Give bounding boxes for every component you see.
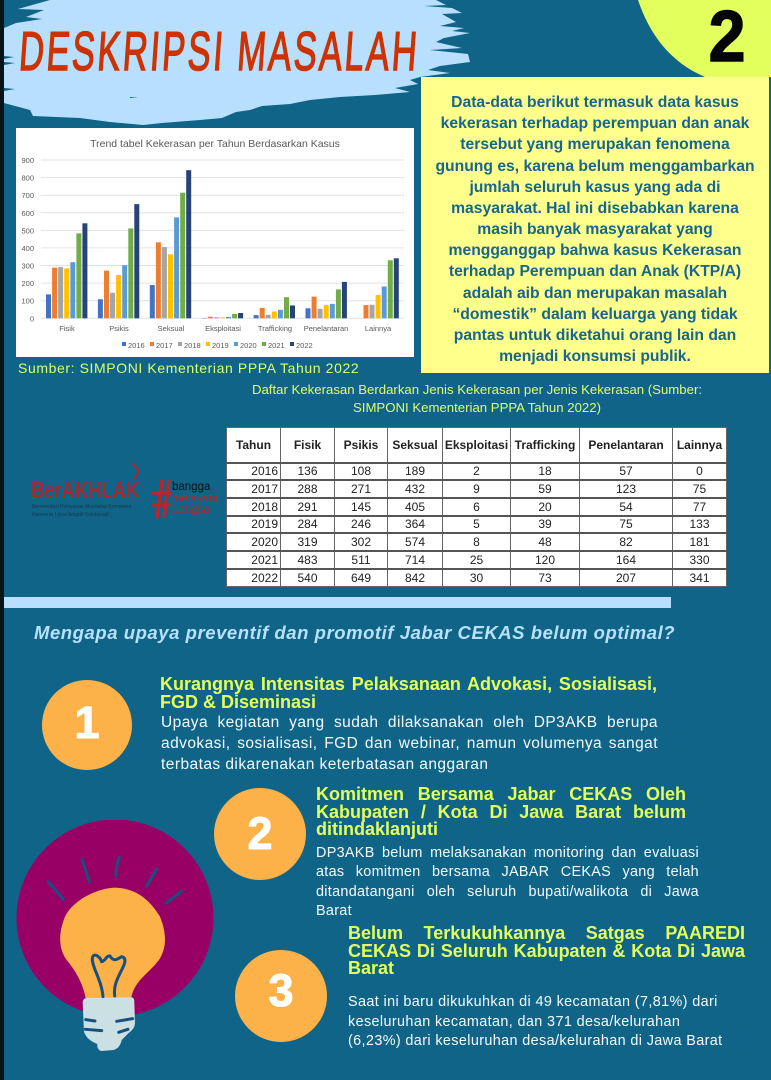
step 3 heading: Barat xyxy=(348,958,394,978)
icon: light bulb xyxy=(16,820,214,1051)
panel: description callout xyxy=(421,77,769,373)
data table: 25 xyxy=(470,553,483,567)
data table: 207 xyxy=(616,571,636,585)
data table xyxy=(226,427,727,587)
data table: 405 xyxy=(405,500,425,514)
y axis labels: 500 xyxy=(21,226,34,235)
section divider bar xyxy=(4,597,671,608)
data table: 30 xyxy=(470,571,483,585)
table caption: Daftar Kekerasan Berdarkan Jenis Kekerasan per Jenis Kekerasan (Sumber: xyxy=(252,382,702,397)
step 2 body: DP3AKB belum melaksanakan monitoring dan evaluasi xyxy=(316,845,699,861)
data table: 2019 xyxy=(251,517,278,531)
y axis labels: 300 xyxy=(21,262,34,270)
y axis labels: 400 xyxy=(21,244,34,253)
category labels: Lainnya xyxy=(365,324,392,333)
step 2 heading: Komitmen Bersama Jabar CEKAS Oleh xyxy=(316,784,686,804)
legend: 2020 xyxy=(240,341,257,350)
data table: 714 xyxy=(405,553,425,567)
bar chart: trend by case xyxy=(16,128,414,357)
data table: 5 xyxy=(473,517,480,531)
data table: 75 xyxy=(693,482,706,496)
step 1 heading xyxy=(160,674,657,712)
data table: 181 xyxy=(689,535,710,549)
step 3 body xyxy=(348,994,723,1049)
table caption: SIMPONI Kementerian PPPA Tahun 2022) xyxy=(353,400,601,415)
category labels: Eksploitasi xyxy=(205,324,241,333)
step 1 body: terbatas dikarenakan keterbatasan anggaran xyxy=(161,756,488,773)
data table: Seksual xyxy=(392,438,438,452)
panel: description callout: adalah aib dan merupakan masalah xyxy=(463,285,727,302)
data table: 20 xyxy=(538,500,552,514)
panel: description callout: jumlah seluruh kasus yang ada di xyxy=(469,179,721,196)
data table: 288 xyxy=(297,482,318,496)
data table: 284 xyxy=(297,517,318,531)
data table: 483 xyxy=(297,553,318,567)
table caption xyxy=(252,382,702,415)
step 2 heading: ditindaklanjuti xyxy=(316,819,438,839)
step 2 body: Barat xyxy=(316,903,352,919)
logo: BerAKHLAK: Harmonis Loyal Adaptif Kolaboratif xyxy=(32,512,109,518)
legend: 2022 xyxy=(296,341,313,350)
step 3 body: (6,23%) dari keseluruhan desa/kelurahan di Jawa Barat xyxy=(348,1033,723,1049)
data table: 330 xyxy=(689,553,710,567)
data table: 341 xyxy=(689,571,710,585)
data table: Fisik xyxy=(294,438,321,452)
step 1 body: advokasi, sosialisasi, FGD dan webinar, namun volumenya sangat xyxy=(161,735,658,752)
data table: 2020 xyxy=(251,535,278,549)
data table: 302 xyxy=(351,535,371,549)
panel: description callout: masyarakat. Hal ini disebabkan karena xyxy=(451,200,739,217)
data table: 73 xyxy=(538,571,552,585)
step 3 number badge xyxy=(235,950,327,1042)
data table: 246 xyxy=(351,517,371,531)
legend: 2017 xyxy=(156,341,173,350)
panel: description callout: mengganggap bahwa kasus Kekerasan xyxy=(449,242,741,259)
step 2 xyxy=(214,784,699,919)
background dark left edge xyxy=(0,0,4,1080)
data table: 511 xyxy=(351,553,371,567)
chart title: Trend tabel Kekerasan per Tahun Berdasarkan Kasus xyxy=(90,138,340,150)
data table: 48 xyxy=(538,535,552,549)
data table: Trafficking xyxy=(515,438,575,452)
data table: 82 xyxy=(619,535,633,549)
panel: description callout: gunung es, karena belum menggambarkan xyxy=(435,158,755,175)
step 3 heading xyxy=(348,923,746,978)
legend: 2016 xyxy=(128,341,145,350)
step 3 body: Saat ini baru dikukuhkan di 49 kecamatan (7,81%) dari xyxy=(348,994,718,1010)
step 1 body xyxy=(161,714,658,773)
data table: 120 xyxy=(535,553,555,567)
y axis labels xyxy=(21,156,34,323)
data table: 57 xyxy=(619,464,633,478)
step 1 body: Upaya kegiatan yang sudah dilaksanakan oleh DP3AKB berupa xyxy=(161,714,658,731)
logo: BerAKHLAK: BerAKHLAK xyxy=(31,477,139,503)
data table: 2022 xyxy=(251,571,278,585)
step 2 body: ditandatangani oleh seluruh bupati/walikota di Jawa xyxy=(316,884,699,900)
category labels: Fisik xyxy=(59,324,75,333)
data table: 39 xyxy=(538,517,552,531)
step 1 xyxy=(42,674,658,773)
data table: 164 xyxy=(616,553,636,567)
data table: 271 xyxy=(351,482,371,496)
step 3 heading: Belum Terkukuhkannya Satgas PAAREDI xyxy=(348,923,745,943)
data table: 18 xyxy=(538,464,552,478)
data table: Psikis xyxy=(344,438,378,452)
data table: 540 xyxy=(297,571,318,585)
data table: 364 xyxy=(405,517,425,531)
data table: Lainnya xyxy=(677,438,722,452)
step 1 heading: FGD & Diseminasi xyxy=(160,692,316,712)
data table: 432 xyxy=(405,482,425,496)
y axis labels: 800 xyxy=(21,174,34,183)
panel: description callout: terhadap Perempuan dan Anak (KTP/A) xyxy=(449,263,741,280)
category labels: Trafficking xyxy=(258,324,292,333)
step 2 heading xyxy=(316,784,686,839)
panel: description callout: Data-data berikut termasuk data kasus xyxy=(451,94,739,111)
legend: 2018 xyxy=(184,341,201,350)
panel: description callout: masih banyak masyarakat yang xyxy=(477,221,713,238)
data table: 108 xyxy=(351,464,371,478)
step 3 heading: CEKAS Di Seluruh Kabupaten & Kota Di Jawa xyxy=(348,940,745,960)
category labels: Penelantaran xyxy=(304,324,348,333)
data table: 0 xyxy=(696,464,703,478)
step 2 number badge xyxy=(214,788,306,880)
data table: Eksploitasi xyxy=(445,438,508,452)
panel: description callout: kekerasan terhadap perempuan dan anak xyxy=(441,115,749,132)
data table: 59 xyxy=(538,482,552,496)
panel: description callout: “domestik” dalam keluarga yang tidak xyxy=(452,306,738,323)
data table: 319 xyxy=(297,535,318,549)
category labels: Seksual xyxy=(158,324,185,333)
bars xyxy=(46,170,399,318)
step 1 number badge: 1 xyxy=(74,697,100,748)
step 1 number badge xyxy=(42,680,132,770)
data table: 2017 xyxy=(251,482,278,496)
data table: 133 xyxy=(689,517,710,531)
data table: 291 xyxy=(297,500,318,514)
legend: 2021 xyxy=(268,341,285,350)
step 2 body: atas komitmen bersama JABAR CEKAS yang telah xyxy=(316,864,699,880)
chart source: Sumber: SIMPONI Kementerian PPPA Tahun 2022 xyxy=(18,360,359,376)
section heading: Mengapa upaya preventif dan promotif Jabar CEKAS belum optimal? xyxy=(34,622,675,643)
data table: 2018 xyxy=(251,500,278,514)
corner decoration: lime shape xyxy=(638,0,771,77)
brush stroke title background xyxy=(4,0,470,125)
y axis labels: 900 xyxy=(21,156,34,165)
y axis labels: 700 xyxy=(21,191,34,200)
panel: description callout: tersebut yang merupakan fenomena xyxy=(460,136,730,153)
data table: 123 xyxy=(616,482,636,496)
category labels: Psikis xyxy=(109,324,129,333)
data table: 6 xyxy=(473,500,480,514)
step 2 number badge: 2 xyxy=(247,808,273,859)
y axis labels: 200 xyxy=(21,279,34,288)
data table: 2021 xyxy=(251,553,278,567)
panel: description callout: menjadi konsumsi publik. xyxy=(499,348,691,365)
data table: 2016 xyxy=(251,464,278,478)
logo: BerAKHLAK: Berorientasi Pelayanan Akuntabel Kompeten xyxy=(32,504,131,510)
step 2 body xyxy=(316,845,699,919)
logo: bangga melayani bangsa: melayani xyxy=(172,492,218,504)
data table: Tahun xyxy=(236,438,271,452)
logo: bangga melayani bangsa: bangsa xyxy=(172,504,210,516)
data table: 189 xyxy=(405,464,425,478)
logo: BerAKHLAK xyxy=(31,462,140,518)
data table: Penelantaran xyxy=(588,438,664,452)
y axis labels: 0 xyxy=(30,314,34,323)
step 1 heading: Kurangnya Intensitas Pelaksanaan Advokasi, Sosialisasi, xyxy=(160,674,657,694)
data table: 9 xyxy=(473,482,480,496)
step 2 heading: Kabupaten / Kota Di Jawa Barat belum xyxy=(316,802,686,822)
data table: 2 xyxy=(473,464,480,478)
data table: 574 xyxy=(405,535,425,549)
step 3 body: keseluruhan kecamatan, dan 371 desa/kelurahan xyxy=(348,1014,680,1030)
data table: 145 xyxy=(351,500,371,514)
y axis labels: 100 xyxy=(21,297,34,306)
legend: 2019 xyxy=(212,341,229,350)
y axis labels: 600 xyxy=(21,209,34,218)
data table: 8 xyxy=(473,535,480,549)
data table: 75 xyxy=(619,517,633,531)
data table: 649 xyxy=(351,571,371,585)
step 3 number badge: 3 xyxy=(268,965,294,1016)
logo: bangga melayani bangsa xyxy=(151,480,218,518)
step 3 xyxy=(235,923,746,1049)
data table: 77 xyxy=(693,500,706,514)
category labels xyxy=(59,324,392,333)
data table: 842 xyxy=(405,571,425,585)
data table: 136 xyxy=(297,464,318,478)
legend xyxy=(122,341,313,350)
logo: bangga melayani bangsa: bangga xyxy=(172,481,210,493)
data table: 54 xyxy=(619,500,633,514)
panel: description callout: pantas untuk diketahui orang lain dan xyxy=(454,327,736,344)
